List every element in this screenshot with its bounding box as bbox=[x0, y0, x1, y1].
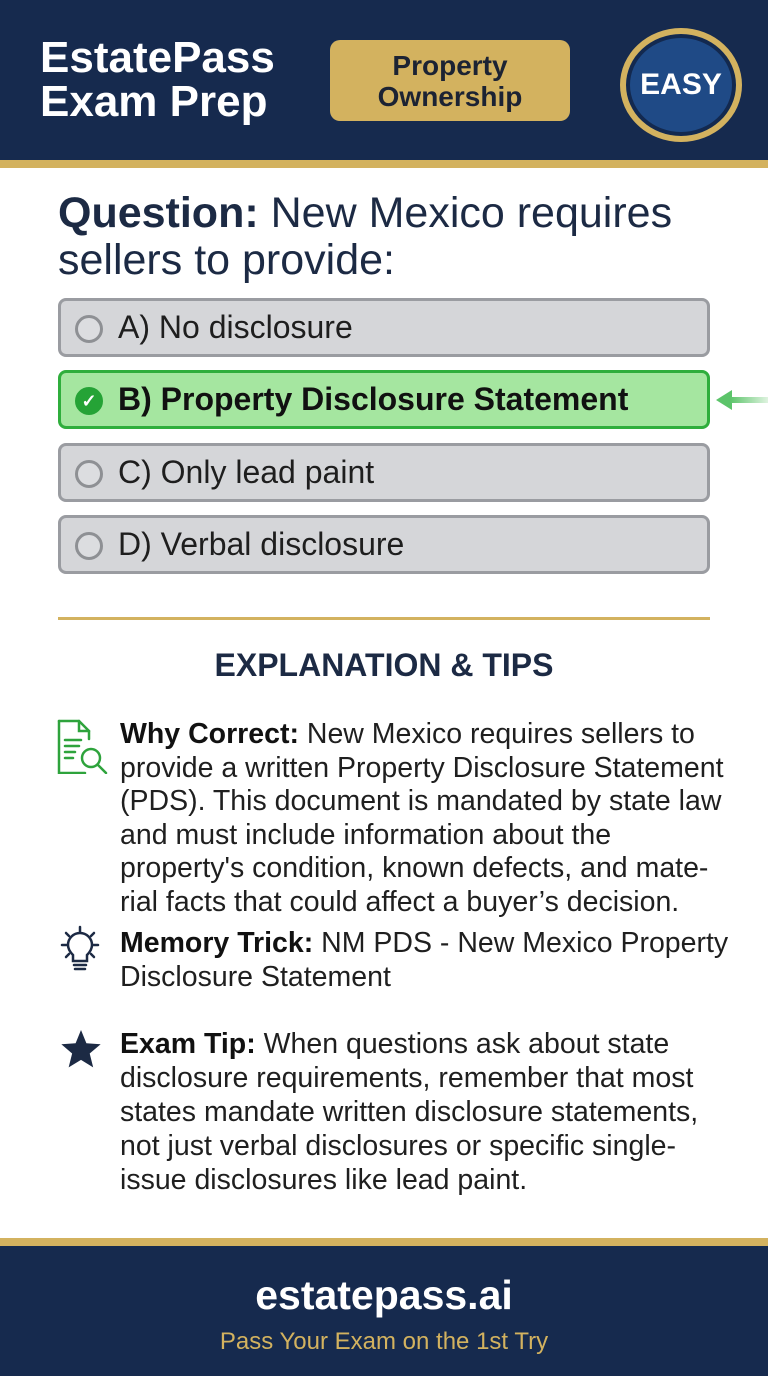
section heading: EXPLANATION & TIPS bbox=[214, 647, 553, 683]
why correct text bbox=[120, 718, 724, 918]
question: Question: New Mexico requires bbox=[58, 189, 672, 237]
arrow pointer bbox=[716, 390, 768, 410]
option B correct: ✓ bbox=[81, 391, 97, 411]
option B correct bbox=[58, 370, 710, 429]
brand title: EstatePass bbox=[40, 33, 275, 82]
exam tip text: not just verbal disclosures or specific single- bbox=[120, 1130, 676, 1162]
memory trick text: Disclosure Statement bbox=[120, 960, 391, 992]
option A bbox=[58, 298, 710, 357]
header band bbox=[0, 0, 768, 168]
question bbox=[58, 189, 672, 284]
footer bbox=[0, 1238, 768, 1376]
brand title: Exam Prep bbox=[40, 77, 267, 126]
option D bbox=[58, 515, 710, 574]
footer tagline: Pass Your Exam on the 1st Try bbox=[220, 1328, 548, 1355]
option C bbox=[58, 443, 710, 502]
option C: C) Only lead paint bbox=[118, 454, 374, 490]
memory trick text: Memory Trick: NM PDS - New Mexico Property bbox=[120, 927, 728, 959]
icon: star bbox=[62, 1030, 100, 1068]
difficulty badge bbox=[620, 28, 742, 142]
option B correct: B) Property Disclosure Statement bbox=[118, 381, 628, 417]
exam tip text: disclosure requirements, remember that most bbox=[120, 1062, 693, 1094]
why correct text: provide a written Property Disclosure Statement bbox=[120, 752, 724, 784]
why correct text: (PDS). This document is mandated by state law bbox=[120, 785, 721, 817]
icon: document search bbox=[58, 720, 108, 774]
why correct text: rial facts that could affect a buyer’s decision. bbox=[120, 886, 679, 918]
question: sellers to provide: bbox=[58, 236, 395, 284]
memory trick text bbox=[120, 927, 728, 992]
brand title bbox=[40, 33, 275, 126]
category tag bbox=[330, 40, 570, 121]
why correct text: Why Correct: New Mexico requires sellers to bbox=[120, 718, 695, 750]
why correct text: property's condition, known defects, and mate- bbox=[120, 852, 708, 884]
exam tip text bbox=[120, 1028, 698, 1196]
footer site: estatepass.ai bbox=[255, 1272, 513, 1318]
icon: lightbulb bbox=[60, 926, 100, 970]
difficulty badge: EASY bbox=[640, 68, 722, 101]
why correct text: and must include information about the bbox=[120, 818, 611, 850]
exam tip text: Exam Tip: When questions ask about state bbox=[120, 1028, 669, 1060]
exam tip text: states mandate written disclosure statements, bbox=[120, 1096, 698, 1128]
category tag: Ownership bbox=[378, 81, 522, 112]
option D: D) Verbal disclosure bbox=[118, 526, 404, 562]
option A: A) No disclosure bbox=[118, 309, 353, 345]
exam tip text: issue disclosures like lead paint. bbox=[120, 1164, 527, 1196]
category tag: Property bbox=[392, 50, 508, 81]
